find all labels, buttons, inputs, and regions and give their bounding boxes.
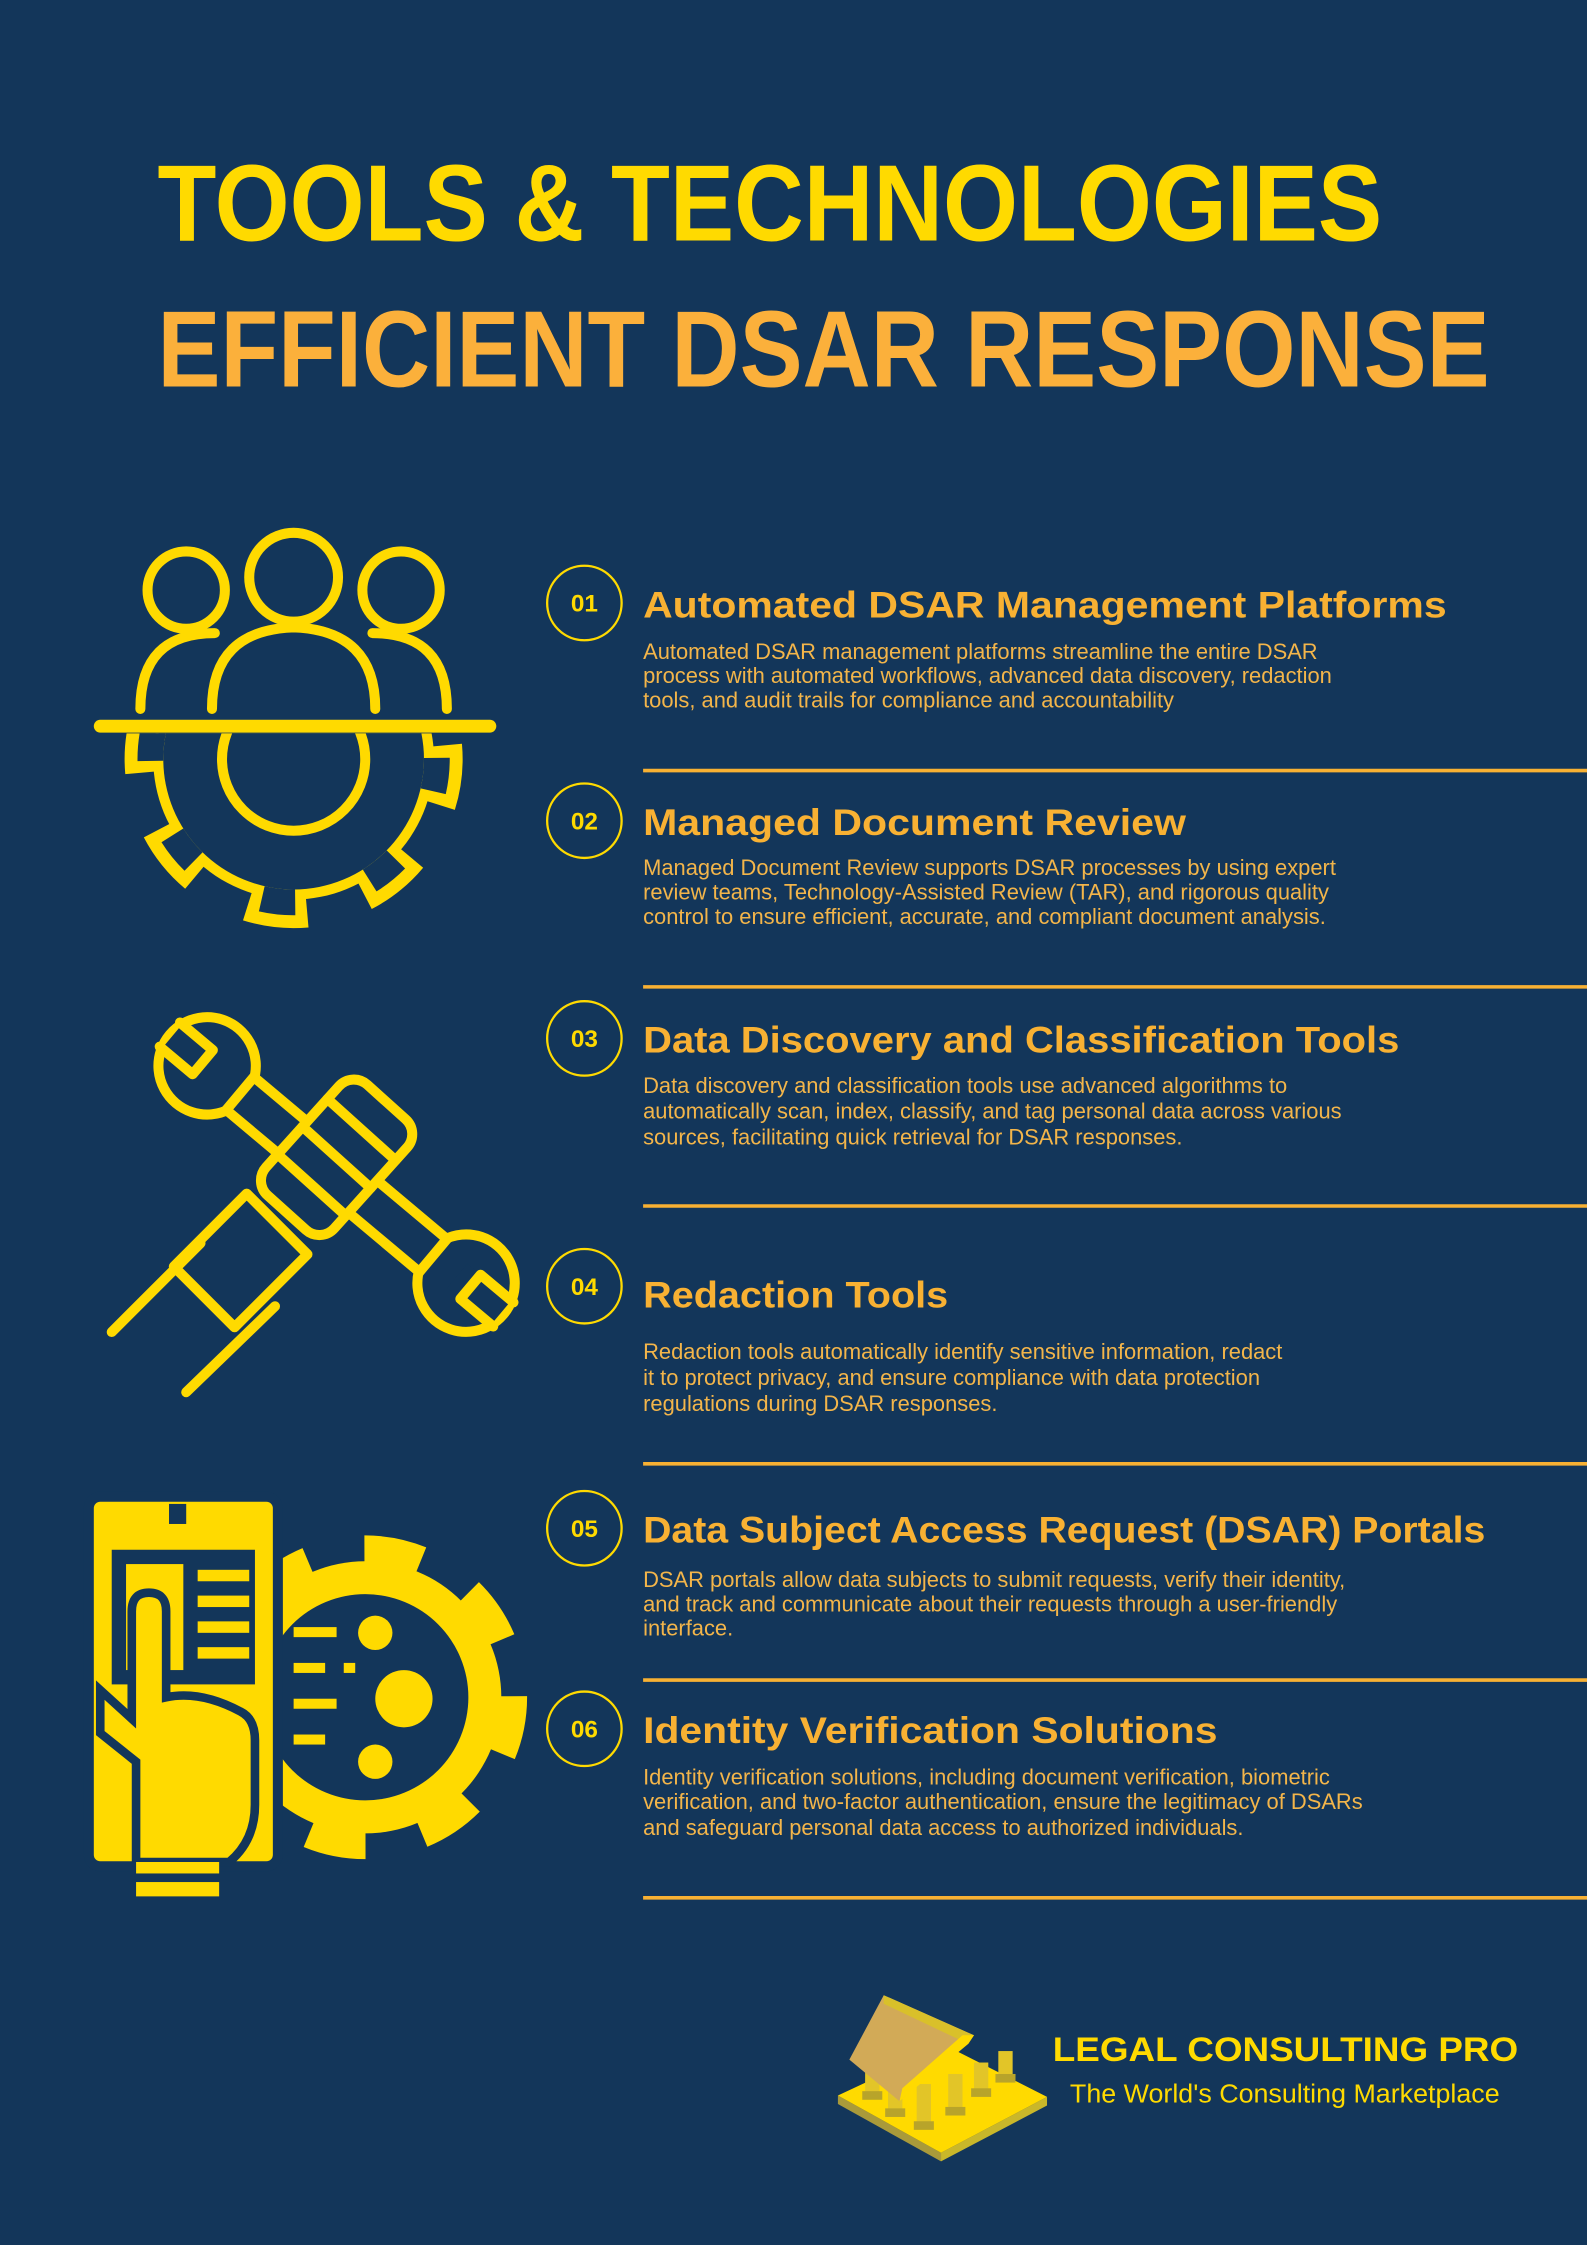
item 03: automatically scan, index, classify, and tag personal data across various bbox=[643, 1099, 1342, 1124]
item 04: regulations during DSAR responses. bbox=[643, 1391, 997, 1416]
title bbox=[158, 143, 1490, 411]
item 04: Redaction tools automatically identify sensitive information, redact bbox=[643, 1339, 1282, 1364]
item 02: Managed Document Review supports DSAR processes by using expert bbox=[643, 855, 1336, 880]
item 04 bbox=[547, 1249, 1282, 1416]
item 02: control to ensure efficient, accurate, and compliant document analysis. bbox=[643, 904, 1326, 929]
item 01: process with automated workflows, advanced data discovery, redaction bbox=[643, 663, 1332, 688]
item 04: 04 bbox=[571, 1274, 598, 1301]
item 01: Automated DSAR Management Platforms bbox=[643, 583, 1447, 625]
item 06: and safeguard personal data access to authorized individuals. bbox=[643, 1815, 1243, 1840]
item 02: Managed Document Review bbox=[643, 801, 1187, 843]
item 01 bbox=[547, 566, 1447, 713]
item 04: it to protect privacy, and ensure compliance with data protection bbox=[643, 1365, 1260, 1390]
item 05: 05 bbox=[571, 1516, 598, 1543]
logo: text bbox=[1053, 2031, 1518, 2109]
item 05 bbox=[547, 1491, 1485, 1641]
item 03: 03 bbox=[571, 1026, 598, 1053]
item 02 bbox=[547, 783, 1336, 929]
item 03: sources, facilitating quick retrieval for DSAR responses. bbox=[643, 1124, 1182, 1149]
item 06: 06 bbox=[571, 1716, 598, 1743]
item 03 bbox=[547, 1001, 1399, 1149]
item 02: 02 bbox=[571, 808, 598, 835]
item 06: Identity Verification Solutions bbox=[643, 1709, 1217, 1751]
icon: phone and gear bbox=[89, 1497, 508, 1896]
logo: text: The World's Consulting Marketplace bbox=[1070, 2081, 1500, 2109]
logo: text: LEGAL CONSULTING PRO bbox=[1053, 2031, 1518, 2069]
icon: wrench in hand bbox=[112, 997, 535, 1392]
item 01: 01 bbox=[571, 591, 598, 618]
item 04: Redaction Tools bbox=[643, 1274, 948, 1316]
item 06 bbox=[547, 1692, 1363, 1840]
item 05: DSAR portals allow data subjects to submit requests, verify their identity, bbox=[643, 1567, 1345, 1592]
item 03: Data discovery and classification tools use advanced algorithms to bbox=[643, 1073, 1287, 1098]
item 03: Data Discovery and Classification Tools bbox=[643, 1019, 1399, 1061]
item 01: Automated DSAR management platforms streamline the entire DSAR bbox=[643, 639, 1318, 664]
icon: team and gear bbox=[100, 533, 490, 925]
logo: building icon bbox=[838, 1995, 1047, 2161]
title: TOOLS & TECHNOLOGIES bbox=[158, 143, 1382, 265]
item 01: tools, and audit trails for compliance and accountability bbox=[643, 688, 1174, 713]
item 05: and track and communicate about their requests through a user-friendly bbox=[643, 1591, 1337, 1616]
item 06: Identity verification solutions, including document verification, biometric bbox=[643, 1765, 1330, 1790]
item 05: interface. bbox=[643, 1616, 733, 1641]
item 02: review teams, Technology-Assisted Review (TAR), and rigorous quality bbox=[643, 879, 1329, 904]
item 05: Data Subject Access Request (DSAR) Portals bbox=[643, 1509, 1485, 1551]
item 06: verification, and two-factor authentication, ensure the legitimacy of DSARs bbox=[643, 1789, 1363, 1814]
